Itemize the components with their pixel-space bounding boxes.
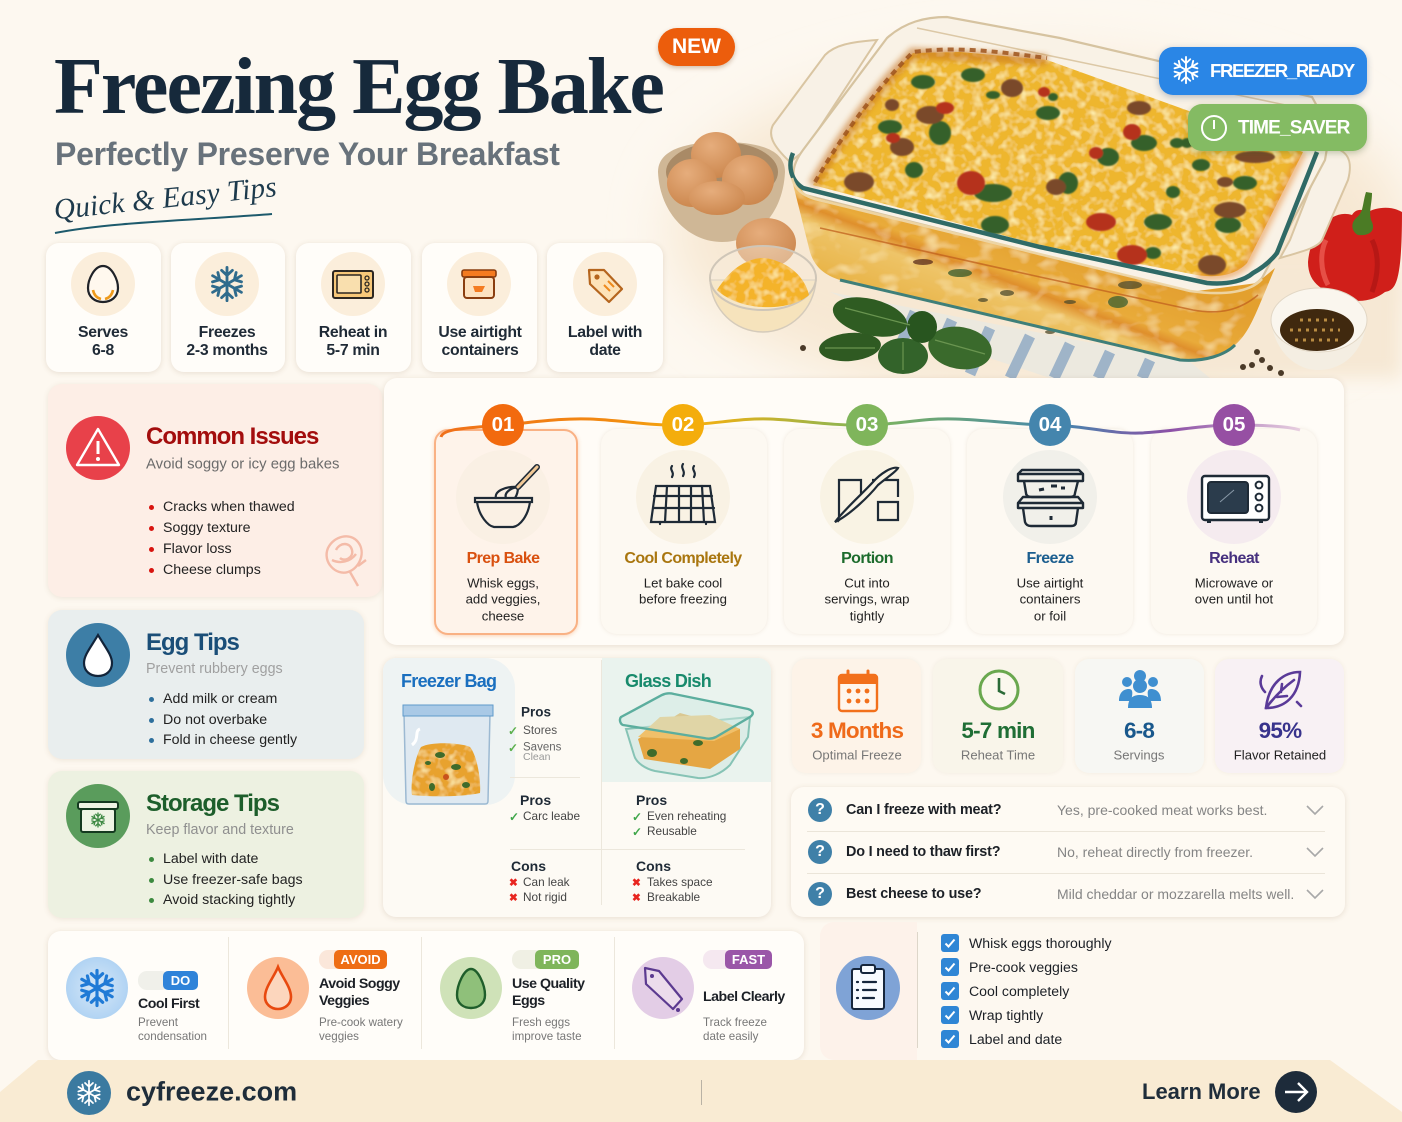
list: Cracks when thawed [163,499,295,515]
faq row 1: ? [815,801,825,818]
list: freezer bag pros, upper: Stores [523,723,557,737]
panel: checklist [820,922,1170,1060]
tip: cool first: Prevent [138,1016,178,1029]
list: freezer bag pros, upper: ✓ [508,741,518,755]
call to action: Learn More [1142,1079,1261,1104]
list [149,691,297,748]
step 4: freeze: Freeze [1026,550,1074,567]
icon: arrow button [1275,1071,1317,1113]
icon: water drop [66,623,130,687]
tip: cool first: DO [171,973,190,988]
step 3: portion: tightly [850,608,884,623]
bowl of shredded cheese [710,246,816,332]
pepper [1308,192,1402,301]
list: Add milk or cream [163,691,277,707]
stat card: label: date [589,342,621,359]
faq row 3: ? [815,885,825,902]
faq row 3: Mild cheddar or mozzarella melts well. [1057,886,1294,902]
list: Label with date [163,851,258,867]
tip: cool first [66,957,226,1047]
list: freezer bag pros, upper: Pros [521,704,551,719]
faq row 2 [807,840,1329,864]
metric: 5-7 min: 5-7 min [961,718,1035,743]
stat card: serves: 6-8 [92,342,114,359]
stat card: freezes: Freezes [199,324,255,341]
icon: clipboard [836,956,900,1020]
step 2: cool completely [600,428,768,635]
list: freezer bag cons: Cons [511,858,546,874]
stat card: label: Label with [568,324,642,341]
checklist items [941,933,1131,1051]
tip: use quality eggs: improve taste [512,1030,582,1043]
faq row 2: ? [815,843,825,860]
faq row 2: Do I need to thaw first? [846,844,1000,860]
faq row 3 [807,882,1329,906]
stat card: reheat: 5-7 min [326,342,380,359]
list: freezer bag cons: Can leak [523,875,570,889]
list: Avoid stacking tightly [163,892,295,908]
metric: flavor retained: Flavor Retained [1234,747,1326,762]
step 3: portion: Cut into [844,575,890,590]
step 1: prep bake: add veggies, [466,591,540,606]
tip: avoid soggy veggies: AVOID [340,952,381,967]
faq row 3: Best cheese to use? [846,886,981,902]
watermark: rose [325,535,366,586]
list: freezer bag pros: ✓ [509,810,519,824]
tip: avoid soggy veggies: Pre-cook watery [319,1016,403,1029]
tip: label clearly: Label Clearly [703,989,785,1005]
spinach leaves [818,290,995,374]
tip: label clearly: Track freeze [703,1016,767,1029]
list [149,499,295,578]
casserole top surface [813,52,1303,276]
checklist items: Label and date [969,1031,1062,1047]
step numbers: 05 [1223,413,1245,436]
icon: warning [66,416,130,480]
icon: microwave [1200,474,1270,523]
list: freezer bag cons [509,858,570,904]
icon: orange drop [247,957,309,1019]
metric: 5-7 min [933,659,1063,773]
heading: glass dish: Glass Dish [625,671,711,691]
faq row 1 [808,798,1324,822]
title: Freezing Egg Bake [54,43,663,131]
script heading with underline: Quick & Easy Tips [52,171,278,226]
metric: 3 months [792,659,921,773]
badge: new: NEW [672,35,721,58]
stat card: label [547,243,663,372]
list: Use freezer-safe bags [163,872,303,888]
tip: label clearly [632,950,797,1047]
icon: storage container [66,784,130,848]
tip: avoid soggy veggies: veggies [319,1030,359,1043]
list: glass dish cons: ✖ [632,877,641,889]
subtitle: Perfectly Preserve Your Breakfast [55,136,560,172]
badge: time saver [1188,104,1367,151]
progress wave line [440,417,1300,438]
step 2: cool completely: Cool Completely [624,550,742,567]
icon: tag [573,252,637,316]
list: glass dish cons [632,858,713,904]
list: glass dish pros: ✓ [632,810,642,824]
panel: storage tips: Storage Tips [146,790,279,817]
step numbers: 01 [492,413,514,436]
list: glass dish cons: Cons [636,858,671,874]
panel: common issues: Avoid soggy or icy egg bakes [146,457,339,473]
stat card: containers: containers [442,342,518,359]
step 4: freeze: Use airtight [1017,575,1083,590]
icon: egg [71,252,135,316]
list: glass dish pros: Pros [636,792,667,808]
list: glass dish pros: ✓ [632,825,642,839]
vegetables and meat [844,68,1275,275]
badge: time saver: TIME_SAVER [1238,118,1350,138]
panel: common issues [48,384,382,597]
step 5: reheat: Reheat [1209,550,1259,567]
list: freezer bag cons: ✖ [509,892,518,904]
checklist items: Whisk eggs thoroughly [969,935,1112,951]
scattered peppercorns [800,345,1284,376]
metric: servings [1075,659,1204,773]
tip: avoid soggy veggies [247,950,417,1047]
loose egg [736,218,796,268]
step numbers [482,404,1255,446]
list: freezer bag pros, upper: Savens [523,741,561,753]
dish front side [790,172,1275,360]
list: freezer bag pros, upper: ✓ [508,724,518,738]
step 3: portion: servings, wrap [824,591,910,606]
tip: cool first: condensation [138,1030,207,1043]
tip: avoid soggy veggies: Avoid Soggy [319,976,400,992]
panel: egg tips: Egg Tips [146,629,239,656]
panel: process steps [384,378,1344,645]
tip: use quality eggs: Fresh eggs [512,1016,570,1029]
panel: faq [791,787,1345,917]
list: Fold in cheese gently [163,732,297,748]
metric: 3 months: 3 Months [811,718,903,743]
step 5: reheat: oven until hot [1195,591,1273,606]
step numbers: 04 [1039,413,1061,436]
icon: container [447,252,511,316]
panel: storage tips [48,771,364,918]
bowl of peppercorns [1271,288,1367,370]
step 5: reheat: Microwave or [1195,575,1273,590]
list: Soggy texture [163,520,251,536]
bowl of eggs [658,132,785,242]
icon: clock [1201,115,1227,141]
icon: snowflake [1174,56,1198,84]
metric: 5-7 min: Reheat Time [961,747,1035,762]
stat card: containers [422,243,537,372]
tip: cool first: Cool First [138,996,199,1012]
step 3: portion [783,428,951,635]
footer band [0,1060,1402,1122]
list: glass dish cons: Breakable [647,890,700,904]
list: glass dish cons: Takes space [647,875,713,889]
icon: snowflake [66,957,128,1019]
list: freezer bag pros: Pros [520,792,551,808]
list: glass dish pros: Reusable [647,824,697,838]
step 1: prep bake: Whisk eggs, [467,575,539,590]
panel: quick tips strip [48,931,804,1060]
icon: calendar [838,670,878,712]
stat card: reheat: Reheat in [319,324,387,341]
icon: cooling rack [650,462,716,526]
list: freezer bag pros, upper: Clean [523,751,550,763]
list [149,851,303,908]
step 1: prep bake: Prep Bake [467,550,539,567]
metric: flavor retained: 95% [1259,718,1301,743]
tip: avoid soggy veggies: Veggies [319,993,369,1009]
badge: freezer ready: FREEZER_READY [1210,60,1354,81]
icon: leaf [1259,670,1302,710]
tip: label clearly: FAST [732,952,765,967]
kitchen towel [830,292,1210,378]
stat card: reheat [296,243,411,372]
illustration: glass dish [618,692,754,780]
panel: egg tips [48,610,364,759]
icon: people [1119,670,1161,708]
metric: 3 months: Optimal Freeze [812,747,902,762]
baking dish [771,17,1350,360]
icon: stacked containers [1016,468,1084,528]
tip: use quality eggs: PRO [543,952,571,967]
dish handles [771,40,1350,258]
tip: use quality eggs [440,950,610,1047]
icon: green egg [440,957,502,1019]
list: Flavor loss [163,541,232,557]
step 4: freeze: or foil [1034,608,1066,623]
list: Cheese clumps [163,562,261,578]
glass rim [790,152,1317,283]
list: freezer bag cons: ✖ [509,877,518,889]
website: cyfreeze.com [126,1076,297,1106]
step 1: prep bake [432,428,580,638]
step 1: prep bake: cheese [482,608,524,623]
tip: use quality eggs: Eggs [512,993,545,1009]
step numbers: 02 [672,413,694,436]
tip: use quality eggs: Use Quality [512,976,585,992]
panel: container comparison [383,658,771,917]
icon: purple tag [632,957,694,1019]
list: freezer bag pros: Carc leabe [523,809,580,823]
faq row 1: Can I freeze with meat? [846,802,1001,818]
panel: egg tips: Prevent rubbery eggs [146,661,283,677]
metric: flavor retained [1215,659,1344,773]
badge: freezer ready [1159,47,1367,95]
badge: new [658,28,735,66]
step 3: portion: Portion [841,550,893,567]
icon: clock [978,670,1020,710]
tip: label clearly: date easily [703,1030,758,1043]
stat card: freezes: 2-3 months [186,342,268,359]
list: freezer bag pros, upper [508,704,561,763]
list: glass dish cons: ✖ [632,892,641,904]
stat card: containers: Use airtight [438,324,522,341]
illustration: freezer bag [402,704,494,805]
list: glass dish pros: Even reheating [647,809,726,823]
step 2: cool completely: before freezing [639,591,727,606]
panel: common issues: Common Issues [146,423,318,450]
metric: servings: 6-8 [1124,718,1154,743]
icon: knife and portions [834,466,900,523]
stat card: freezes [171,243,285,372]
faq row 1: Yes, pre-cooked meat works best. [1057,802,1267,818]
list: freezer bag cons: Not rigid [523,890,567,904]
heading: freezer bag: Freezer Bag [401,671,496,691]
hero illustration: egg bake dish and ingredients [658,16,1402,384]
stat card: serves [46,243,161,372]
step 4: freeze: containers [1020,591,1080,606]
list: glass dish pros [632,792,726,839]
icon: snowflake logo [67,1071,111,1115]
step 4: freeze [966,428,1134,635]
step 5: reheat [1150,428,1318,635]
icon: microwave [321,252,385,316]
checklist items: Pre-cook veggies [969,959,1078,975]
panel: storage tips: Keep flavor and texture [146,822,294,838]
step 2: cool completely: Let bake cool [644,575,722,590]
step numbers: 03 [856,413,878,436]
stat card: serves: Serves [78,324,128,341]
metric: servings: Servings [1114,747,1164,762]
list: freezer bag pros [509,792,580,824]
faq row 2: No, reheat directly from freezer. [1057,844,1253,860]
checklist items: Wrap tightly [969,1007,1043,1023]
icon: snowflake [195,252,259,316]
icon: whisk and bowl [474,464,540,528]
list: Do not overbake [163,712,267,728]
checklist items: Cool completely [969,983,1069,999]
